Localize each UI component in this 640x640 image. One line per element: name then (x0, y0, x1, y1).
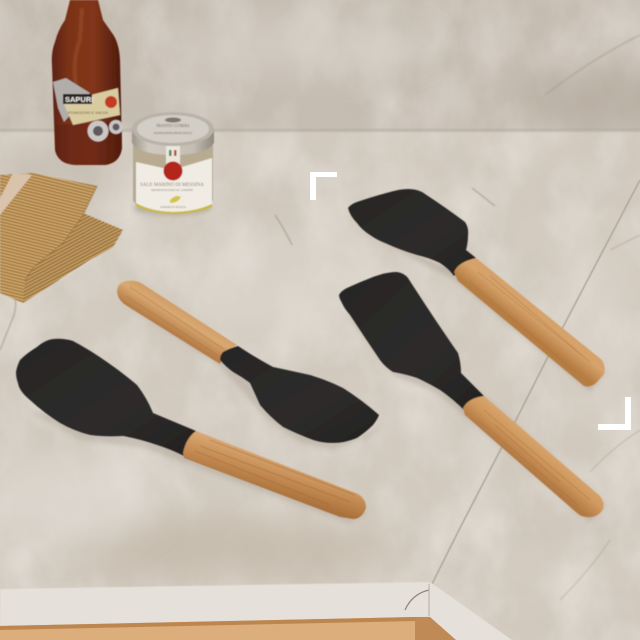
spatula: left large (16, 339, 366, 524)
front edge of counter (0, 582, 512, 640)
jar label: SAPORI DI SICILIA (160, 205, 187, 209)
jar lid: FRANTOI CUTRERA (156, 124, 190, 128)
corner bracket: top left (310, 172, 337, 200)
shadow (118, 300, 385, 450)
shadow (345, 312, 606, 522)
silicone head (16, 339, 196, 456)
counter top (0, 129, 640, 640)
bottle label: POMODORI E SALSA (68, 110, 108, 115)
wooden handle (454, 258, 605, 387)
wooden handle (117, 281, 237, 364)
corner bracket: bottom right (598, 397, 631, 430)
silicone head (339, 272, 484, 411)
jar (132, 112, 214, 215)
spatula: centre right (339, 272, 606, 522)
silicone head (348, 189, 476, 276)
jar lid: MANDARINO BIOLOGICO (154, 131, 193, 135)
wooden handle (463, 396, 604, 517)
spatula: centre upside-down (117, 281, 385, 450)
bottle (52, 0, 123, 165)
wall backsplash (0, 0, 640, 134)
bottle label: SAPURI (65, 95, 93, 104)
spatula: top right (348, 189, 606, 392)
jar label: SALE MARINO DI MESSINA (140, 183, 204, 188)
shadow (30, 412, 366, 524)
jar label: AROMATIZZATO AL LIMONE (151, 188, 193, 192)
right counter slab and seam (431, 180, 640, 600)
shadow (356, 226, 606, 392)
folded striped towel (0, 173, 123, 303)
silicone head (220, 346, 379, 443)
wooden cabinet below counter (0, 617, 456, 640)
jar label (136, 146, 212, 214)
wooden handle (183, 431, 366, 519)
jar lid (132, 112, 214, 155)
bottle label (53, 78, 123, 142)
